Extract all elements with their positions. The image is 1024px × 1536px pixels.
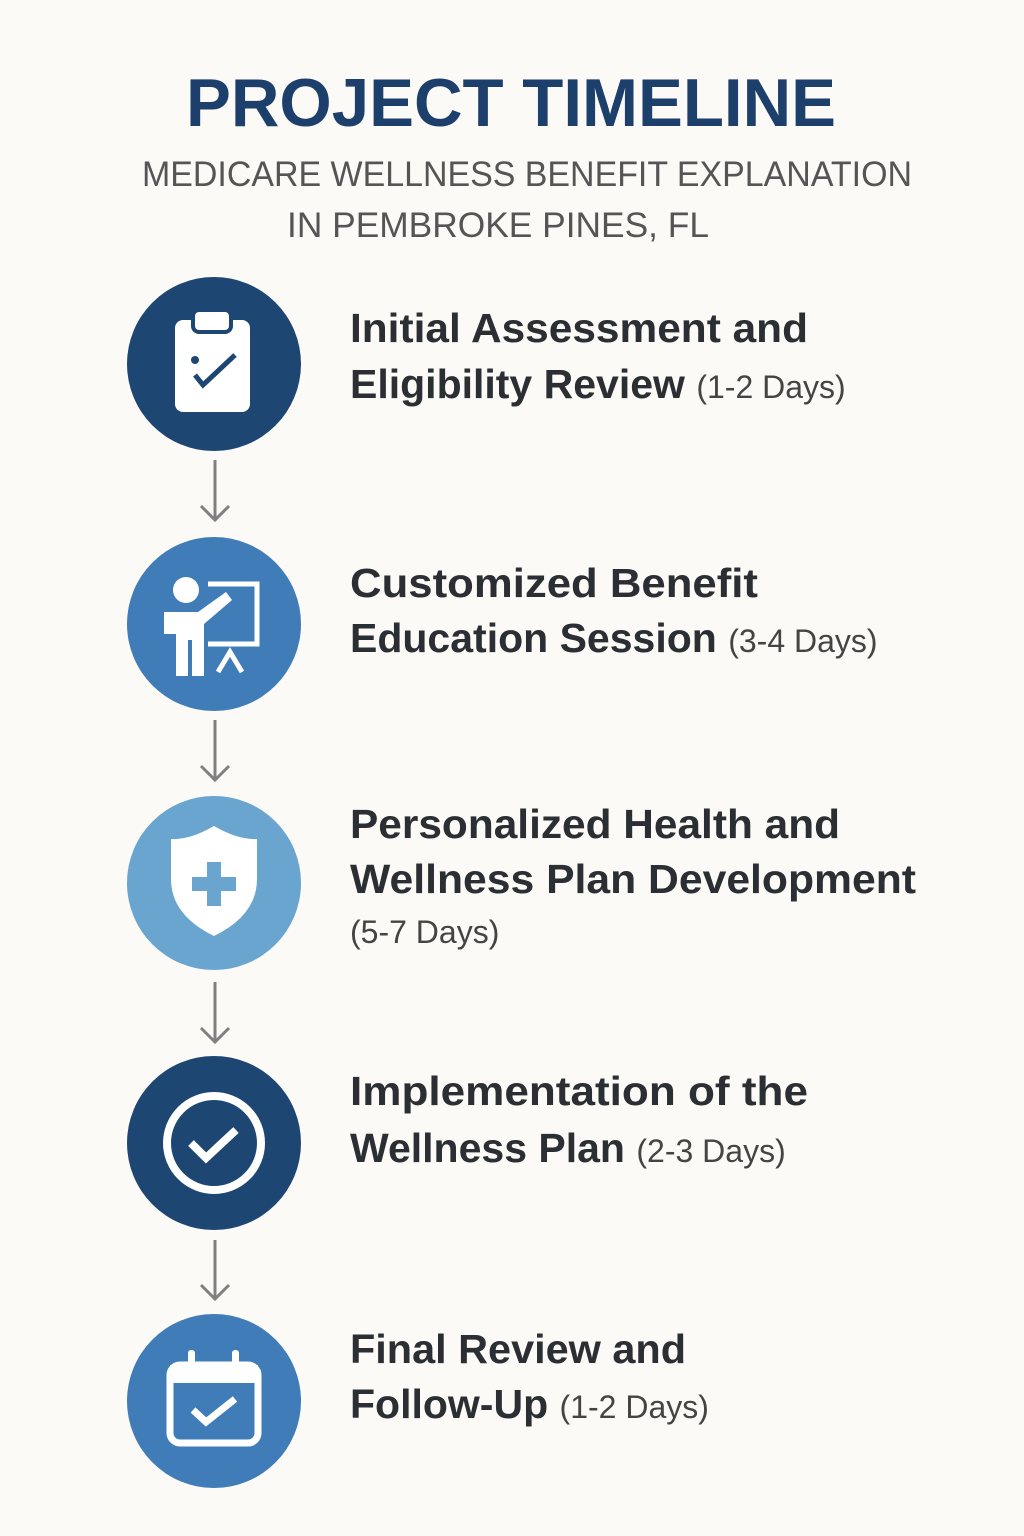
subtitle xyxy=(142,155,912,245)
step 4 text: Wellness Plan (2-3 Days) xyxy=(350,1125,786,1171)
arrow 2 xyxy=(201,720,229,780)
step 2 text: Customized Benefit xyxy=(350,560,758,606)
subtitle: IN PEMBROKE PINES, FL xyxy=(287,206,709,245)
step 3 text: Wellness Plan Development xyxy=(350,856,916,902)
step 1 text xyxy=(350,305,846,407)
step 2 icon: presenter xyxy=(127,537,301,711)
step 4 text: Implementation of the xyxy=(350,1068,808,1114)
arrow 4 xyxy=(201,1240,229,1299)
arrow 3 xyxy=(201,982,229,1042)
step 5 text: Follow-Up (1-2 Days) xyxy=(350,1381,709,1427)
arrow 1 xyxy=(201,460,229,520)
step 1 icon: clipboard xyxy=(127,277,301,451)
step 1 text: Initial Assessment and xyxy=(350,305,808,351)
step 3 text xyxy=(350,801,916,950)
step 5 icon: calendar xyxy=(127,1314,301,1488)
step 4 text xyxy=(350,1068,808,1171)
step 2 text xyxy=(350,560,878,661)
step 5 text: Final Review and xyxy=(350,1326,686,1372)
title: PROJECT TIMELINE xyxy=(186,65,836,141)
step 4 icon: check circle xyxy=(127,1056,301,1230)
subtitle: MEDICARE WELLNESS BENEFIT EXPLANATION xyxy=(142,155,912,194)
step 3 text: Personalized Health and xyxy=(350,801,840,847)
step 2 text: Education Session (3-4 Days) xyxy=(350,615,878,661)
step 3 icon: shield xyxy=(127,796,301,970)
step 5 text xyxy=(350,1326,709,1427)
step 3 text: (5-7 Days) xyxy=(350,914,499,950)
step 1 text: Eligibility Review (1-2 Days) xyxy=(350,361,846,407)
